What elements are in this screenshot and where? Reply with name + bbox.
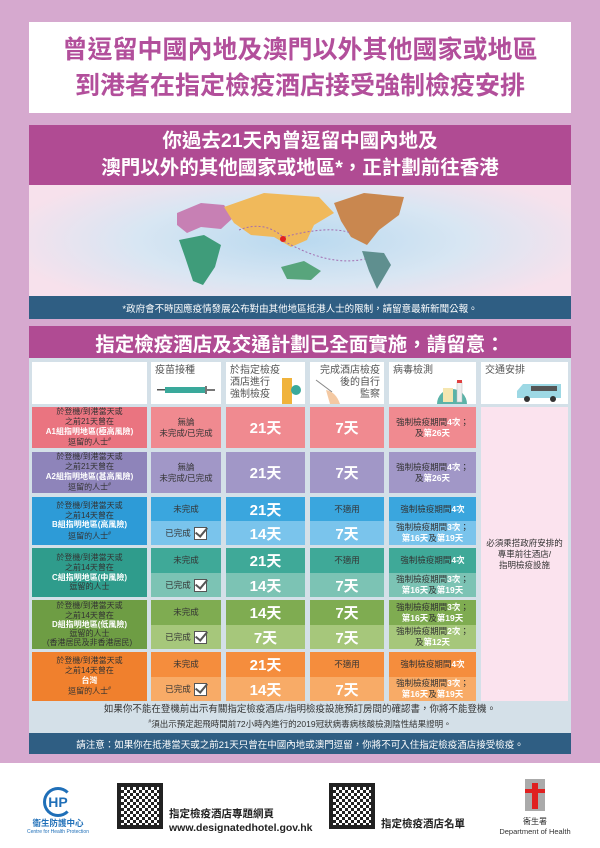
row B: 逗留的人士# [68, 531, 111, 540]
row A1: 於登機/到港當天或 [56, 407, 123, 416]
row A2: 21天 [250, 465, 281, 482]
title box [29, 22, 571, 113]
row B: 14天 [250, 526, 281, 542]
title box: 曾逗留中國內地及澳門以外其他國家或地區 [62, 36, 538, 64]
row B [32, 497, 476, 545]
header: hotel quarantine: 強制檢疫 [230, 389, 270, 400]
row A2: 逗留的人士# [68, 482, 111, 492]
section heading [29, 326, 571, 358]
logo: Department of Health: 衞生署 [523, 817, 547, 826]
header: hotel quarantine: 於指定檢疫 [230, 365, 280, 376]
row Taiwan: 21天 [250, 657, 281, 674]
section heading: 指定檢疫酒店及交通計劃已全面實施，請留意： [95, 334, 505, 356]
transport cell [481, 407, 568, 701]
row B: B組指明地區(高風險) [52, 520, 127, 529]
header: virus testing [389, 362, 476, 404]
row A2: 之前21天曾在 [65, 462, 114, 471]
row Taiwan: 14天 [250, 682, 281, 698]
row C: 21天 [250, 553, 281, 570]
QR code 1 [117, 783, 163, 829]
logo: Department of Health: Department of Health [499, 827, 571, 836]
row D: 7天 [335, 630, 359, 646]
row C: 第16天及第19天 [402, 585, 463, 595]
title box: 到港者在指定檢疫酒店接受強制檢疫安排 [75, 72, 525, 100]
row D: 未完成 [173, 607, 199, 617]
note bar [29, 296, 571, 319]
world map [29, 185, 571, 296]
row D: 7天 [335, 605, 359, 622]
header: virus testing: 病毒檢測 [393, 365, 433, 376]
row Taiwan: 第16天及第19天 [402, 689, 463, 699]
row A1: 21天 [250, 420, 281, 437]
header: vaccine: 疫苗接種 [155, 365, 195, 376]
row B: 7天 [335, 526, 359, 542]
row Taiwan: 於登機/到港當天或 [56, 656, 123, 665]
row A1: 無論 [177, 416, 194, 426]
row B: 21天 [250, 502, 281, 518]
row C: 14天 [250, 578, 281, 594]
row Taiwan: 之前14天曾在 [65, 666, 114, 675]
row A1: 之前21天曾在 [65, 417, 114, 426]
row A2: 強制檢疫期間4次； [396, 462, 469, 472]
row D: (香港居民及非香港居民) [47, 638, 132, 647]
row C: 不適用 [334, 555, 360, 565]
row A1 [32, 407, 476, 448]
row D: D組指明地區(低風險) [52, 620, 127, 629]
row C: 強制檢疫期間3次； [396, 574, 469, 584]
logo: CHP: HP [48, 794, 68, 810]
row C [32, 548, 476, 597]
website text: 指定檢疫酒店專題網頁 [169, 808, 274, 820]
header: vaccine [151, 362, 221, 404]
row Taiwan: 未完成 [173, 659, 199, 669]
footnote text: #須出示預定起飛時間前72小時內進行的2019冠狀病毒病核酸檢測陰性結果證明。 [148, 719, 452, 729]
row Taiwan [32, 652, 476, 701]
row D: 及第12天 [415, 637, 450, 647]
row C: 7天 [335, 578, 359, 594]
warning bar: 請注意：如果你在抵港當天或之前21天只曾在中國內地或澳門逗留，你將不可入住指定檢疫酒店接受檢疫。 [76, 740, 524, 750]
row D: 第16天及第19天 [402, 612, 463, 622]
row C: 已完成 [165, 579, 191, 589]
footnote text: 如果你不能在登機前出示有關指定檢疫酒店/指明檢疫設施預訂房間的確認書，你將不能登機。 [104, 704, 496, 715]
row D: 之前14天曾在 [65, 611, 114, 620]
row C: 未完成 [173, 555, 199, 565]
logo: CHP [27, 787, 89, 835]
row A1: 7天 [335, 420, 359, 437]
row C: 之前14天曾在 [65, 563, 114, 572]
row B: 第16天及第19天 [402, 533, 463, 543]
row Taiwan: 強制檢疫期間3次； [396, 678, 469, 688]
row D: 逗留的人士 [69, 629, 109, 638]
warning bar [29, 733, 571, 754]
QR code 2 [329, 783, 375, 829]
row D: 14天 [250, 605, 281, 622]
header: self monitoring: 後的自行 [340, 377, 380, 388]
row Taiwan: 7天 [335, 682, 359, 698]
header: self monitoring: 監察 [360, 389, 380, 400]
banner: travel history: 澳門以外的其他國家或地區*，正計劃前往香港 [101, 157, 499, 179]
row A1: 逗留的人士# [68, 437, 111, 447]
row Taiwan: 台灣 [81, 676, 97, 685]
transport cell: 專車前往酒店/ [498, 548, 551, 558]
row C: C組指明地區(中風險) [52, 572, 127, 582]
row A2: 及第26天 [415, 472, 450, 482]
banner: travel history [29, 125, 571, 185]
row B: 於登機/到港當天或 [56, 501, 123, 510]
header: hotel quarantine [226, 362, 305, 404]
row Taiwan: 逗留的人士# [68, 686, 111, 696]
website text [169, 808, 313, 834]
row B: 未完成 [173, 504, 199, 514]
row C: 於登機/到港當天或 [56, 553, 123, 562]
transport cell: 指明檢疫設施 [499, 560, 550, 570]
table panel [29, 358, 571, 733]
row C: 強制檢疫期間4次 [400, 555, 465, 565]
row A2: A2組指明地區(甚高風險) [46, 472, 133, 481]
table header [32, 362, 568, 404]
logo: CHP: Centre for Health Protection [27, 829, 89, 835]
row D [32, 600, 476, 649]
row A2: 未完成/已完成 [159, 472, 213, 482]
website text: www.designatedhotel.gov.hk [169, 822, 313, 834]
note bar: *政府會不時因應疫情發展公布對由其他地區抵港人士的限制，請留意最新新聞公報。 [122, 304, 478, 314]
footer [0, 763, 600, 848]
row D: 已完成 [165, 631, 191, 641]
logo: CHP: 衞生防護中心 [32, 818, 84, 828]
transport cell: 必須乘搭政府安排的 [486, 538, 563, 548]
row A1: 強制檢疫期間4次； [396, 416, 469, 426]
row A1: 未完成/已完成 [159, 428, 213, 438]
row A2: 7天 [335, 465, 359, 482]
header: transport [481, 362, 568, 404]
row D: 強制檢疫期間3次； [396, 602, 469, 612]
row B: 強制檢疫期間4次 [400, 504, 465, 514]
header: hotel quarantine: 酒店進行 [230, 377, 270, 388]
row D: 強制檢疫期間2次； [396, 626, 469, 636]
hotel list text: 指定檢疫酒店名單 [381, 818, 465, 830]
row A2: 無論 [177, 462, 194, 472]
row A1: 及第26天 [415, 428, 450, 438]
row C: 逗留的人士 [69, 582, 109, 591]
row Taiwan: 強制檢疫期間4次 [400, 659, 465, 669]
row A1: A1組指明地區(極高風險) [46, 427, 133, 436]
row D: 於登機/到港當天或 [56, 601, 123, 610]
row B: 之前14天曾在 [65, 511, 114, 520]
row A2 [32, 452, 476, 493]
banner: travel history: 你過去21天內曾逗留中國內地及 [162, 130, 438, 152]
row B: 已完成 [165, 527, 191, 537]
header: transport: 交通安排 [485, 365, 525, 376]
row A2: 於登機/到港當天或 [56, 452, 123, 461]
row B: 不適用 [334, 504, 360, 514]
row Taiwan: 已完成 [165, 683, 191, 693]
row B: 強制檢疫期間3次； [396, 522, 469, 532]
logo: Department of Health [499, 779, 571, 836]
header: self monitoring [310, 362, 384, 404]
row Taiwan: 不適用 [334, 659, 360, 669]
footnote text [104, 704, 496, 729]
header: self monitoring: 完成酒店檢疫 [320, 365, 380, 376]
row D: 7天 [254, 630, 277, 646]
